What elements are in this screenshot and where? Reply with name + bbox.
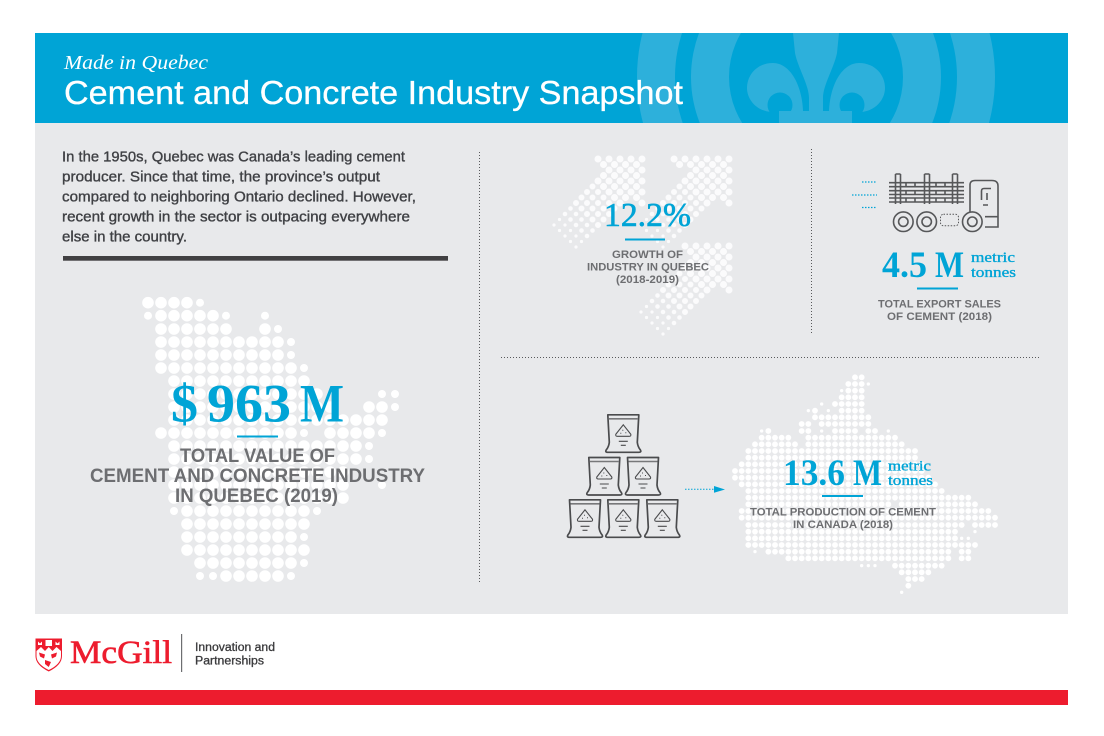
value: $963 M: 963 <box>207 374 291 434</box>
value: 4.5 M: 4.5 <box>882 244 927 285</box>
unit name: Innovation and <box>195 642 275 654</box>
dot map of Quebec <box>148 303 396 576</box>
unit: metric tonnes: tonnes <box>971 265 1016 281</box>
value: 13.6 M: M <box>853 452 882 493</box>
unit name: Partnerships <box>195 656 264 668</box>
intro text: compared to neighboring Ontario declined. However, <box>62 190 416 206</box>
logo divider <box>181 634 182 672</box>
value caption <box>90 446 425 507</box>
icon: truck <box>852 174 998 232</box>
arrow: bags to Canada <box>685 486 725 493</box>
footer logo <box>36 634 275 672</box>
eyebrow title: Made in Quebec <box>63 52 208 74</box>
main title: Cement and Concrete Industry Snapshot <box>64 74 683 111</box>
growth caption: INDUSTRY IN QUEBEC <box>587 262 709 274</box>
value: $963 M: $ <box>171 374 198 434</box>
wordmark: McGill <box>70 635 172 671</box>
unit: metric tonnes <box>971 250 1016 281</box>
truck motion lines <box>852 182 877 208</box>
production caption: IN CANADA (2018) <box>793 519 893 531</box>
dividers <box>480 149 1041 583</box>
fleur-de-lis watermark with concentric rings <box>637 33 995 123</box>
panel: production <box>568 377 995 592</box>
value underline <box>237 436 278 438</box>
growth caption <box>587 249 709 286</box>
value: $963 M <box>171 374 344 434</box>
value: 12.2%: 12.2% <box>604 197 691 234</box>
header banner <box>35 33 1068 123</box>
value: 13.6 M: 13.6 <box>783 452 845 493</box>
value underline <box>917 288 958 290</box>
intro text: producer. Since that time, the province’s output <box>62 170 380 186</box>
growth caption: (2018-2019) <box>616 274 679 286</box>
export caption: TOTAL EXPORT SALES <box>878 299 1001 311</box>
intro rule <box>63 256 448 261</box>
value caption: TOTAL VALUE OF <box>180 446 335 467</box>
icon: McGill shield <box>36 638 62 672</box>
value: 4.5 M <box>882 244 964 285</box>
grey content panel <box>35 123 1068 614</box>
unit: metric tonnes: metric <box>971 250 1015 266</box>
intro text: In the 1950s, Quebec was Canada’s leading cement <box>62 150 405 166</box>
export caption <box>878 299 1001 323</box>
icon: stacked cement bags <box>568 415 680 537</box>
value underline <box>625 238 665 240</box>
value underline <box>822 495 863 497</box>
intro text: recent growth in the sector is outpacing everywhere <box>62 210 410 226</box>
icon: dotted growth arrows <box>554 159 729 334</box>
production caption: TOTAL PRODUCTION OF CEMENT <box>750 507 936 519</box>
growth caption: GROWTH OF <box>612 249 683 261</box>
value caption: CEMENT AND CONCRETE INDUSTRY <box>90 466 425 487</box>
unit: metric tonnes <box>888 459 933 489</box>
panel: Quebec value <box>90 303 425 576</box>
value: 13.6 M <box>783 452 882 493</box>
unit name <box>195 642 275 668</box>
panel: export sales <box>852 174 1016 323</box>
unit: metric tonnes: tonnes <box>888 473 933 489</box>
value caption: IN QUEBEC (2019) <box>175 486 338 507</box>
intro text: else in the country. <box>62 230 187 246</box>
value: 4.5 M: M <box>935 244 964 285</box>
production caption <box>750 507 936 531</box>
value: $963 M: M <box>300 374 344 434</box>
unit: metric tonnes: metric <box>888 459 931 475</box>
panel: growth <box>554 159 729 334</box>
export caption: OF CEMENT (2018) <box>887 311 992 323</box>
footer red bar <box>35 690 1068 705</box>
intro text <box>62 150 416 246</box>
dot map of Canada <box>735 377 995 592</box>
